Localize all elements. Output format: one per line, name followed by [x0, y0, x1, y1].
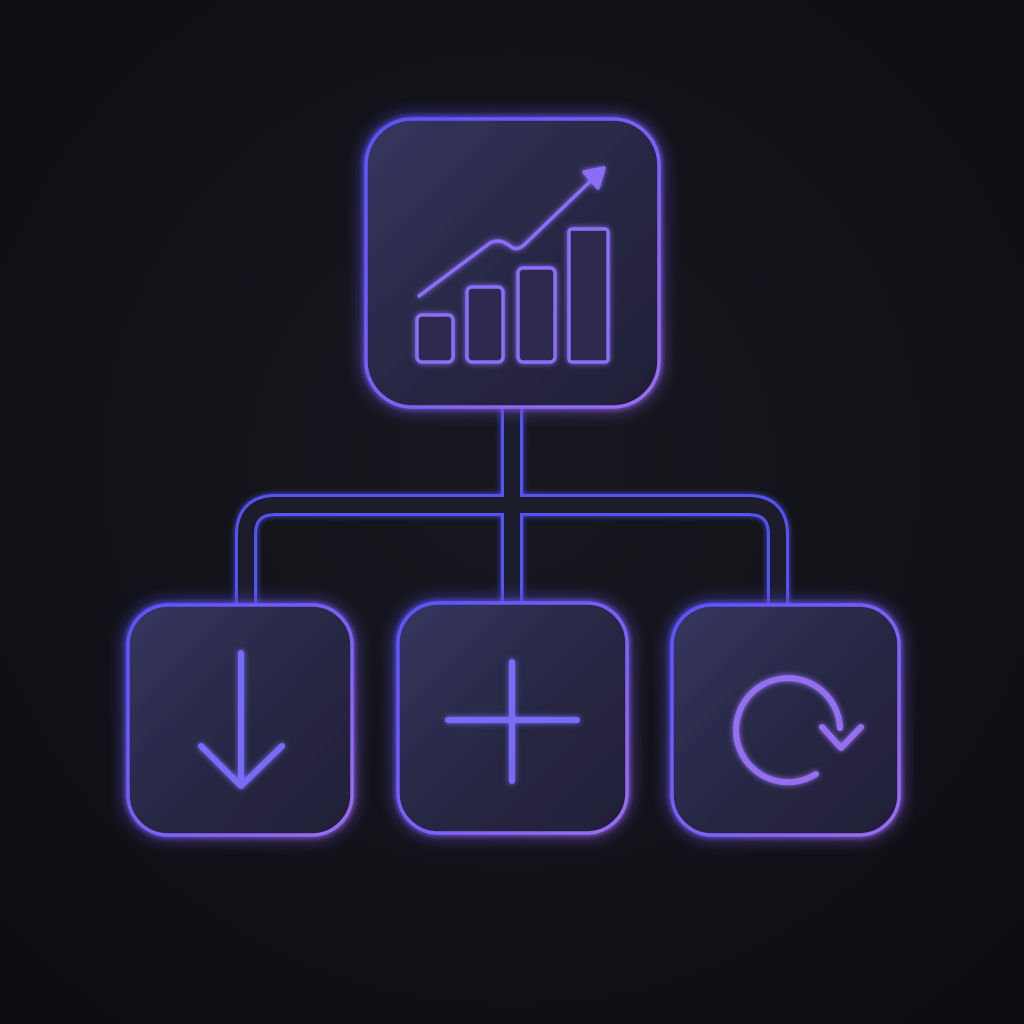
- icon: circular arrow: [736, 678, 861, 782]
- panel: top chart box: [366, 119, 659, 407]
- connector tree: [246, 405, 778, 605]
- panel: refresh box: [672, 605, 899, 835]
- icon: bar chart with rising arrow: [417, 168, 608, 362]
- panel: plus box: [398, 603, 627, 833]
- panel: down arrow box: [128, 605, 352, 835]
- icon: down arrow: [201, 653, 282, 786]
- icon: plus: [448, 662, 577, 781]
